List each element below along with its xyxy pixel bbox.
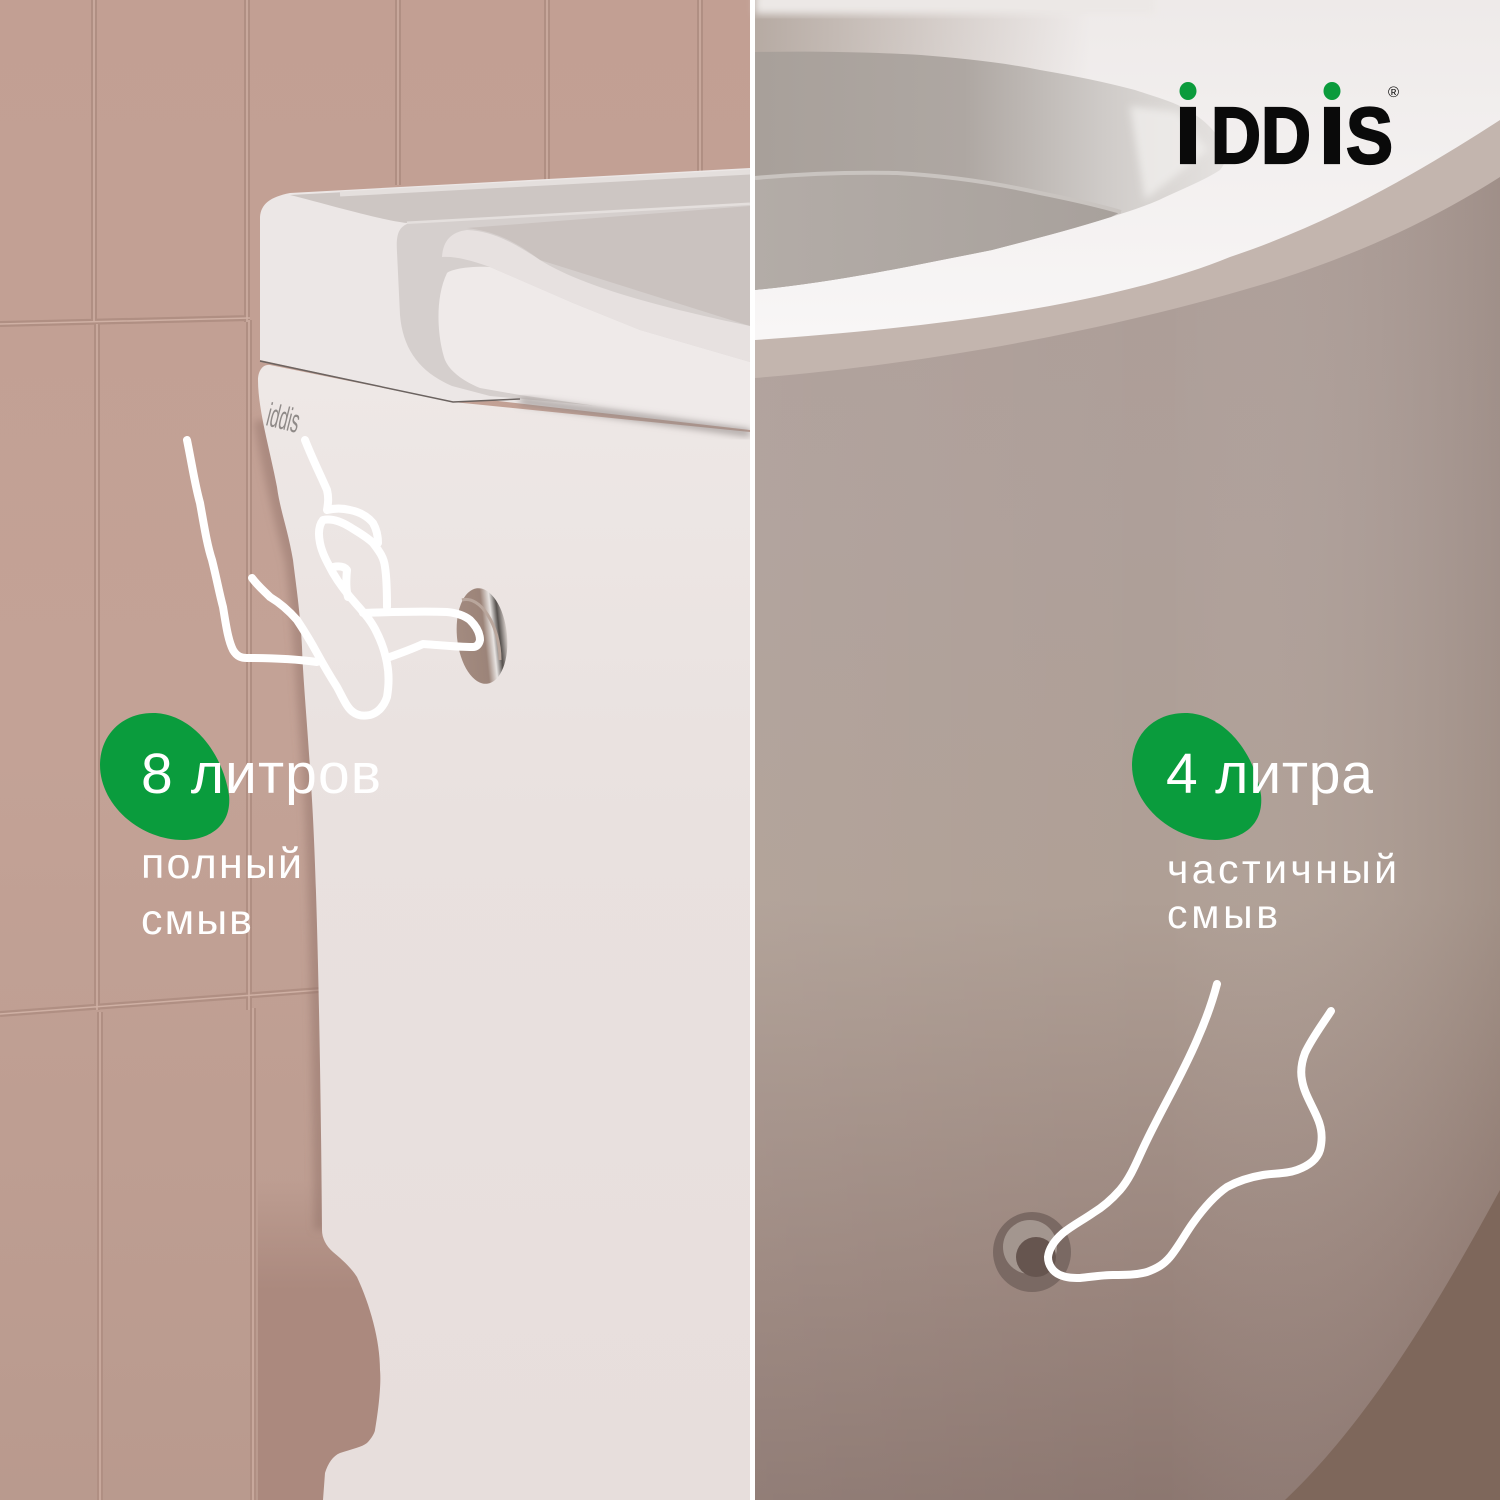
flush button right bbox=[993, 1212, 1071, 1292]
toilet lid bbox=[260, 168, 750, 430]
callout: 8 litres full flush: полный bbox=[141, 840, 302, 888]
logo: IDDIS: D bbox=[1261, 91, 1311, 180]
floor bbox=[1285, 1190, 1500, 1500]
logo: IDDIS: I bbox=[1319, 91, 1345, 180]
tile grout lines bbox=[0, 0, 700, 1500]
inner rim shading bbox=[755, 0, 1100, 100]
bowl rim bbox=[755, 0, 1500, 378]
logo: IDDIS bbox=[1175, 82, 1399, 180]
callout: 8 litres full flush: смыв bbox=[141, 896, 252, 944]
lid inner surface bbox=[467, 206, 750, 326]
water ring bbox=[755, 173, 1121, 212]
bowl interior bbox=[755, 52, 1226, 290]
callout: 4 litres partial flush: 4 литра bbox=[1166, 742, 1373, 806]
logo: IDDIS: D bbox=[1211, 91, 1261, 180]
logo: IDDIS: S bbox=[1346, 91, 1393, 180]
seam between lid and tank bbox=[260, 361, 520, 402]
callout: 8 litres full flush: 8 литров bbox=[141, 742, 381, 806]
tank cast shadow bbox=[262, 420, 322, 1230]
seat bbox=[755, 0, 1500, 340]
icon: hand pressing button bbox=[187, 440, 480, 716]
callout: 8 litres full flush bbox=[100, 713, 381, 944]
callout: 4 litres partial flush bbox=[1132, 713, 1397, 937]
inner water bbox=[755, 173, 1121, 290]
logo: IDDIS: ® bbox=[1388, 84, 1399, 101]
lower seat piece bbox=[438, 267, 750, 428]
upper lid piece bbox=[442, 230, 750, 362]
flush button left bbox=[452, 586, 512, 686]
seat top highlight bbox=[755, 0, 1155, 14]
panel: right photo, toilet bowl bbox=[755, 0, 1500, 1500]
callout: 4 litres partial flush: частичный bbox=[1167, 846, 1397, 892]
lid top highlights bbox=[340, 172, 750, 224]
seat recess bbox=[397, 205, 750, 420]
bowl highlight bbox=[1130, 106, 1208, 200]
divider bbox=[750, 0, 755, 1500]
shadow under lid bbox=[520, 401, 750, 433]
callout: 4 litres partial flush: смыв bbox=[1167, 891, 1278, 937]
icon: foot pressing button bbox=[1048, 984, 1331, 1278]
wall recess shadow bbox=[258, 1180, 388, 1500]
toilet tank body bbox=[258, 365, 750, 1500]
logo: IDDIS: I bbox=[1175, 91, 1201, 180]
logo on tank: iddis bbox=[263, 398, 303, 440]
panel: left photo, wall and tank bbox=[0, 0, 750, 1500]
lid top surface bbox=[290, 170, 750, 223]
